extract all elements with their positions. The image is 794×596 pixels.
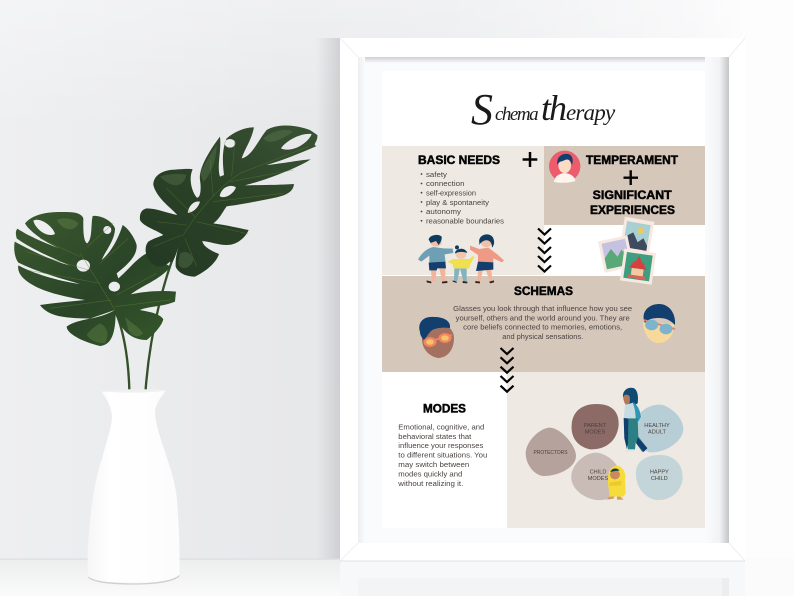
white vase bbox=[88, 389, 180, 585]
list: needs: reasonable boundaries bbox=[426, 216, 504, 226]
blob: healthy adult: HEALTHY bbox=[644, 423, 670, 429]
panel: schemas bbox=[382, 276, 705, 372]
chevrons: down to modes bbox=[500, 348, 514, 392]
figure: girl bbox=[447, 245, 474, 283]
title: chema bbox=[495, 104, 538, 125]
blob: happy child: HAPPY bbox=[650, 470, 669, 476]
icon: man with glasses bbox=[419, 317, 454, 358]
photo: green mountains bbox=[598, 235, 634, 273]
icon: avatar bbox=[549, 151, 580, 183]
blob: healthy adult bbox=[635, 405, 683, 452]
heading: temperament: TEMPERAMENT bbox=[586, 153, 679, 167]
mat board bbox=[358, 57, 729, 543]
list: needs: self-expression bbox=[426, 188, 476, 198]
list: needs: autonomy bbox=[426, 207, 461, 216]
blob: protectors bbox=[526, 428, 576, 476]
chevrons: down to schemas bbox=[538, 228, 551, 272]
icon: plus bbox=[523, 152, 537, 167]
text: modes description: without realizing it. bbox=[397, 479, 463, 488]
panel: temperament bbox=[544, 146, 705, 225]
list: needs: safety bbox=[426, 170, 447, 179]
blob: happy child bbox=[636, 455, 683, 500]
title: erapy bbox=[566, 100, 616, 125]
diagram: mode blobs bbox=[526, 404, 683, 500]
plant stems bbox=[115, 236, 183, 389]
blob: protectors: PROTECTORS bbox=[534, 450, 568, 456]
figure: woman bbox=[470, 234, 504, 283]
panel: basic needs bbox=[382, 146, 544, 275]
text: schemas description bbox=[453, 304, 632, 341]
list: needs bbox=[421, 170, 504, 226]
leaf: upper right bbox=[140, 125, 317, 277]
leaf: lower left bbox=[14, 212, 176, 346]
heading: significant experiences bbox=[590, 188, 675, 217]
text: modes description: behavioral states that bbox=[398, 432, 472, 441]
figure: boy bbox=[418, 235, 453, 283]
glossy floor bbox=[0, 558, 794, 596]
heading: significant experiences: EXPERIENCES bbox=[590, 203, 675, 217]
blob: parent modes: MODES bbox=[585, 430, 606, 436]
text: modes description: may switch between bbox=[398, 460, 469, 469]
panel: modes diagram background bbox=[507, 372, 705, 528]
text: schemas description: and physical sensations. bbox=[502, 332, 583, 341]
monstera plant bbox=[14, 125, 317, 389]
blob: child modes bbox=[571, 453, 622, 500]
icon: photo stack bbox=[598, 217, 656, 285]
list: needs: play & spontaneity bbox=[426, 198, 489, 207]
blob: happy child: CHILD bbox=[651, 476, 668, 482]
blob: parent modes bbox=[572, 404, 619, 449]
photo: mountains with sun bbox=[619, 217, 654, 255]
heading: significant experiences: SIGNIFICANT bbox=[593, 188, 672, 202]
text: schemas description: core beliefs connected to memories, emotions, bbox=[463, 323, 622, 332]
list: needs: connection bbox=[426, 179, 464, 188]
poster bbox=[382, 71, 705, 528]
photo: pagoda bbox=[620, 249, 656, 285]
picture frame bbox=[340, 38, 745, 562]
heading: schemas: SCHEMAS bbox=[514, 284, 573, 298]
figure: standing woman bbox=[623, 388, 647, 452]
heading: modes: MODES bbox=[423, 402, 466, 416]
text: modes description: influence your responses bbox=[398, 441, 483, 450]
title: th bbox=[541, 88, 566, 128]
figure: family bbox=[418, 234, 504, 283]
text: modes description: Emotional, cognitive, and bbox=[398, 422, 484, 432]
text: modes description: modes quickly and bbox=[398, 470, 462, 478]
figure: child in yellow raincoat bbox=[607, 466, 626, 500]
blob: healthy adult: ADULT bbox=[648, 430, 667, 436]
icon: plus bbox=[624, 170, 638, 185]
text: schemas description: yourself, others and the world around you. They are bbox=[456, 313, 630, 322]
blob: child modes: MODES bbox=[588, 476, 609, 482]
blob: child modes: CHILD bbox=[590, 470, 606, 476]
text: modes description bbox=[397, 422, 487, 488]
heading: basic needs: BASIC NEEDS bbox=[418, 153, 500, 167]
blob: parent modes: PARENT bbox=[584, 423, 607, 429]
text: modes description: to different situations. You bbox=[398, 450, 487, 460]
text: schemas description: Glasses you look through that influence how you see bbox=[453, 304, 632, 313]
icon: woman with glasses bbox=[643, 304, 675, 343]
title: S bbox=[471, 85, 493, 134]
